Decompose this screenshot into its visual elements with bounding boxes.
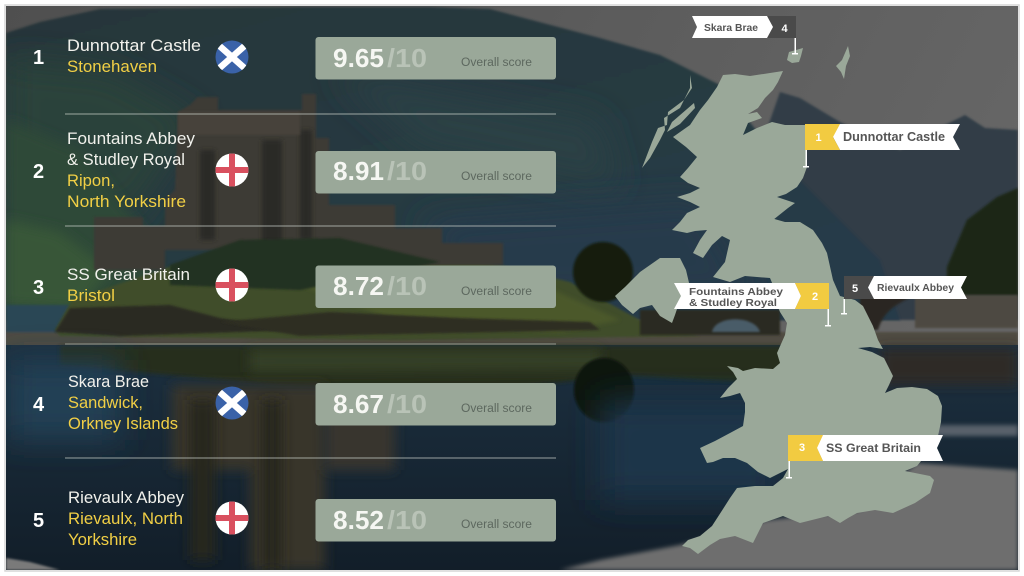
- map flag: Rievaulx Abbey: Rievaulx Abbey: [877, 283, 954, 294]
- rank 4: 4: [33, 394, 45, 416]
- map flag: SS Great Britain: SS Great Britain: [826, 441, 921, 455]
- site name and location 4: [68, 373, 178, 433]
- map flag: Fountains Abbey and Studley Royal: & Studley Royal: [689, 297, 777, 309]
- UK map: [615, 46, 942, 554]
- icon: Scottish flag: [215, 386, 249, 420]
- score box 4: Overall score: [461, 403, 532, 415]
- site name and location 5: Yorkshire: [68, 531, 137, 549]
- rank 3: 3: [33, 277, 44, 299]
- score box 3: 8.72: [333, 271, 384, 301]
- site name and location 3: Bristol: [67, 287, 115, 305]
- site name and location 4: Sandwick,: [68, 394, 143, 412]
- score box 2: /10: [387, 156, 427, 186]
- site name and location 2: Ripon,: [67, 172, 115, 190]
- score box 3: /10: [387, 271, 427, 301]
- site name and location 1: [67, 37, 201, 76]
- map flag: Skara Brae: 4: [781, 23, 788, 35]
- site name and location 4: Skara Brae: [68, 373, 149, 391]
- map flag: Dunnottar Castle: [803, 124, 960, 168]
- map flag: Rievaulx Abbey: [841, 276, 967, 314]
- score box 5: Overall score: [461, 519, 532, 531]
- map: Shetland: [836, 46, 850, 79]
- score box 1: 9.65: [333, 43, 384, 73]
- map: Skye: [667, 103, 695, 132]
- site name and location 5: Rievaulx, North: [68, 510, 183, 528]
- score box 1: Overall score: [461, 57, 532, 69]
- icon: Scottish flag: [215, 40, 249, 74]
- score box 5: 8.52: [333, 505, 384, 535]
- map flag: Fountains Abbey and Studley Royal: [674, 283, 831, 326]
- map flag: Dunnottar Castle: Dunnottar Castle: [843, 130, 945, 144]
- map flag: Skara Brae: [692, 16, 798, 54]
- score box 4: [316, 383, 556, 426]
- icon: English flag: [215, 153, 249, 187]
- score box 1: /10: [387, 43, 427, 73]
- rank 2: 2: [33, 161, 44, 183]
- icon: English flag: [215, 501, 249, 535]
- site name and location 2: & Studley Royal: [67, 151, 185, 169]
- row 2: [33, 130, 556, 211]
- site name and location 1: Dunnottar Castle: [67, 37, 201, 55]
- map flag: Fountains Abbey and Studley Royal: Fountains Abbey: [689, 286, 783, 298]
- map flag: SS Great Britain: 3: [799, 442, 805, 454]
- site name and location 2: [67, 130, 196, 211]
- row 3: [33, 266, 556, 308]
- score box 4: 8.67: [333, 389, 384, 419]
- score box 2: Overall score: [461, 171, 532, 183]
- score box 4: /10: [387, 389, 427, 419]
- site name and location 5: Rievaulx Abbey: [68, 489, 185, 507]
- row 1: [33, 37, 556, 80]
- site name and location 1: Stonehaven: [67, 58, 157, 76]
- site name and location 2: North Yorkshire: [67, 193, 186, 211]
- map flag: Skara Brae: Skara Brae: [704, 22, 758, 34]
- rank 1: 1: [33, 47, 44, 69]
- score box 2: [316, 151, 556, 194]
- reflection: [60, 346, 800, 392]
- row 5: [34, 491, 556, 545]
- map: Orkney: [787, 48, 803, 63]
- score box 5: [316, 499, 556, 542]
- icon: English flag: [215, 268, 249, 302]
- map flag: Fountains Abbey and Studley Royal: 2: [812, 291, 818, 303]
- site name and location 3: SS Great Britain: [67, 266, 190, 284]
- map flag: SS Great Britain: [786, 435, 943, 478]
- row 4: [33, 373, 556, 433]
- score box 5: /10: [387, 505, 427, 535]
- map: Northern Ireland: [615, 258, 690, 323]
- site name and location 3: [67, 266, 190, 305]
- map flag: Rievaulx Abbey: 5: [852, 283, 858, 295]
- map: Great Britain mainland: [672, 71, 942, 554]
- score box 1: [316, 37, 556, 80]
- score box 3: [316, 266, 556, 308]
- score box 2: 8.91: [333, 156, 384, 186]
- castle: [94, 94, 503, 270]
- map flag: Dunnottar Castle: 1: [815, 132, 822, 144]
- map: Outer Hebrides: [642, 75, 692, 168]
- rank 5: 5: [33, 510, 44, 532]
- site name and location 5: [68, 489, 185, 549]
- site name and location 4: Orkney Islands: [68, 415, 178, 433]
- score box 3: Overall score: [461, 286, 532, 298]
- site name and location 2: Fountains Abbey: [67, 130, 196, 148]
